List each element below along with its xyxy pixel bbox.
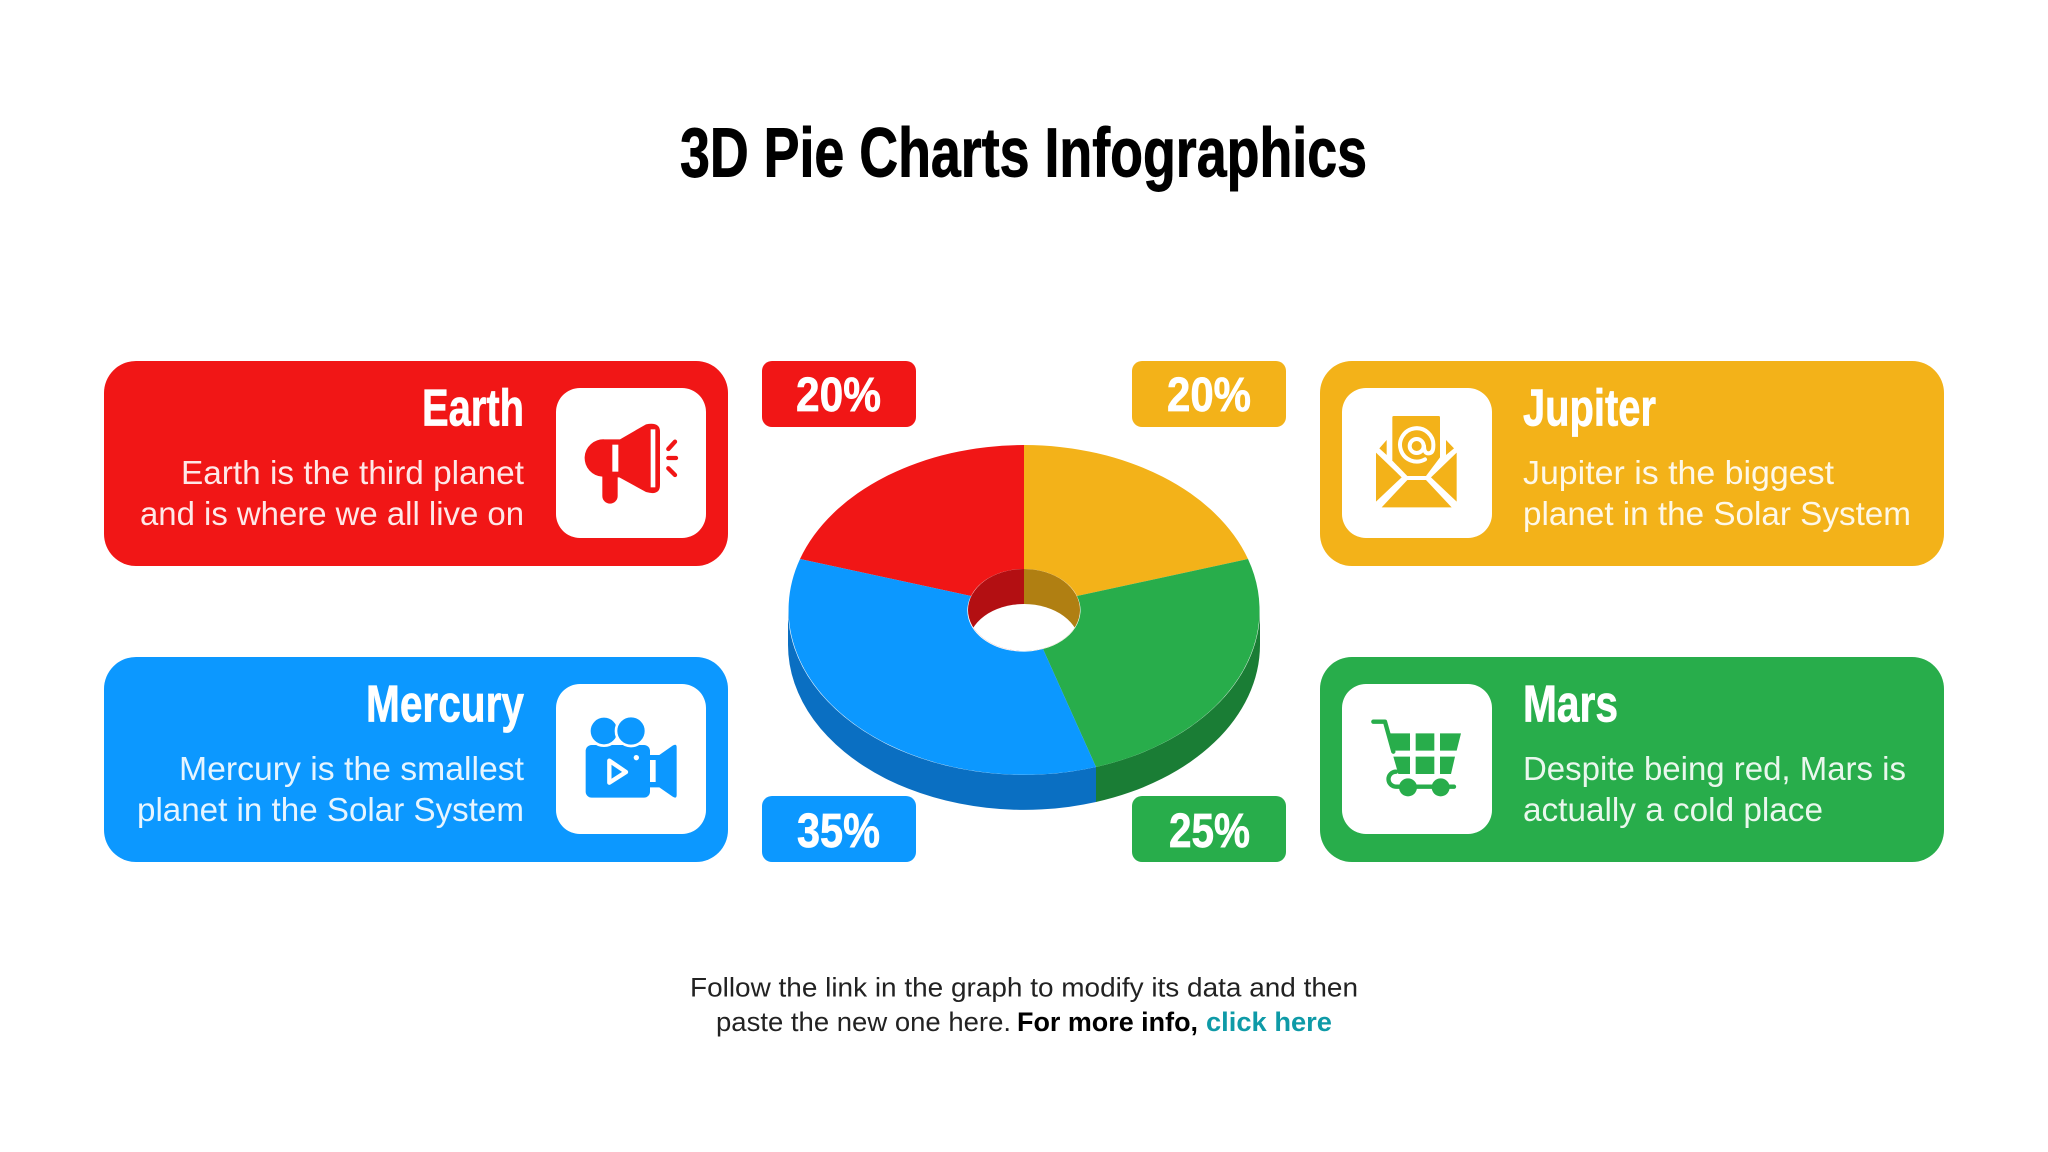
heading: Mercury: Mercury <box>366 676 524 734</box>
panel: Mars <box>1320 657 1944 862</box>
icon: shopping cart <box>1342 684 1492 834</box>
text block: Jupiter description: Jupiter is the biggest <box>1523 454 1834 491</box>
footer note: click here <box>1206 1007 1332 1037</box>
side wall: blue slice <box>788 610 1096 810</box>
percentage badge: yellow 20%: 20% <box>1167 369 1251 422</box>
icon: megaphone <box>556 388 706 538</box>
title: 3D Pie Charts Infographics <box>680 114 1367 192</box>
text block: Earth description: and is where we all live on <box>140 495 524 532</box>
text block: Mercury description: Mercury is the smallest <box>179 750 524 787</box>
heading: Jupiter: Jupiter <box>1523 380 1656 438</box>
slice: yellow 20% <box>1024 445 1248 596</box>
heading: Mars: Mars <box>1523 676 1618 734</box>
text block: Mars description <box>1523 750 1906 828</box>
footer note: Follow the link in the graph to modify its data and then <box>690 972 1358 1002</box>
text block: Mercury description: planet in the Solar System <box>137 791 524 828</box>
footer note <box>690 972 1358 1037</box>
panel: Earth <box>104 361 728 566</box>
panel: Mercury <box>104 657 728 862</box>
icon: email envelope <box>1342 388 1492 538</box>
percentage badge: red 20% <box>762 361 916 427</box>
text block: Earth description <box>140 454 524 532</box>
slice: green 25% <box>1043 559 1260 767</box>
side wall: green slice <box>1096 610 1260 802</box>
footer note: paste the new one here. <box>716 1007 1011 1037</box>
text block: Mercury description <box>137 750 524 828</box>
percentage badge: green 25% <box>1132 796 1286 862</box>
percentage badge: blue 35% <box>762 796 916 862</box>
donut hole <box>968 569 1080 651</box>
slice: red 20% <box>800 445 1024 596</box>
percentage badge: blue 35%: 35% <box>797 805 880 858</box>
percentage badge: yellow 20% <box>1132 361 1286 427</box>
footer note: For more info, <box>1017 1007 1198 1037</box>
text block: Mars description: actually a cold place <box>1523 791 1823 828</box>
percentage badge: red 20%: 20% <box>796 369 881 422</box>
panel: Jupiter <box>1320 361 1944 566</box>
3D donut pie chart <box>788 445 1260 810</box>
text block: Mars description: Despite being red, Mars is <box>1523 750 1906 787</box>
icon: video camera <box>556 684 706 834</box>
text block: Jupiter description: planet in the Solar System <box>1523 495 1911 532</box>
heading: Earth: Earth <box>422 380 524 438</box>
text block: Jupiter description <box>1523 454 1911 532</box>
text block: Earth description: Earth is the third planet <box>181 454 524 491</box>
slice: blue 35% <box>789 559 1096 775</box>
percentage badge: green 25%: 25% <box>1169 805 1250 858</box>
